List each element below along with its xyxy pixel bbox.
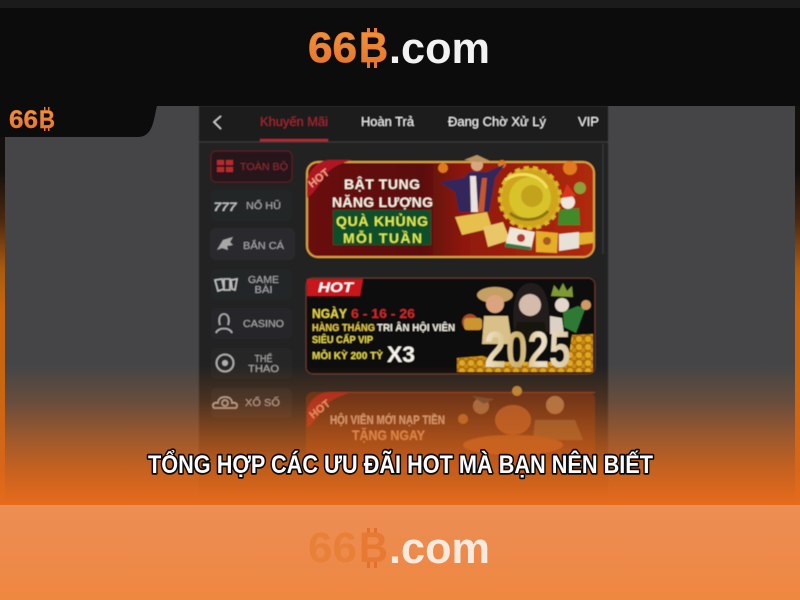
banner headline: BẬT TUNG [344,175,420,192]
header logo: 66B.com: 66 [308,24,357,72]
category: Casino: CASINO [243,319,284,330]
category: Casino [211,308,292,339]
app tab bar: Đang Chờ Xử Lý [448,115,547,129]
app tab bar: Hoàn Trả [361,115,414,129]
banner headline: NĂNG LƯỢNG [332,194,433,210]
grey screenshot background [5,106,795,506]
category: Nổ Hũ: NỔ HŨ [246,199,281,212]
category: Game Bài [211,269,292,300]
category: Xổ Số [211,388,292,418]
app tab bar: VIP [578,115,599,129]
promo banner: Hội viên mới nạp tiền [306,386,595,472]
app tab bar: Khuyến Mãi [260,115,328,129]
banner copy: HÀNG THÁNG [312,321,375,334]
banner copy: TRI ÂN HỘI VIÊN [377,321,455,334]
old man character [558,182,586,225]
banner copy: MỖI KỲ 200 TỶ [312,349,383,362]
hot label: HOT [318,279,355,295]
category: Thể Thao [211,348,292,379]
banner copy [312,306,455,367]
category: Nổ Hũ: 777 [214,200,238,214]
phone app screenshot [199,106,608,506]
bottom orange band [0,505,800,600]
explorer character [440,155,505,212]
banner copy: NGÀY [312,306,348,321]
header logo: 66B.com: .com [389,24,490,73]
promo banner: Hội viên mới nạp tiền: HỘI VIÊN MỚI NẠP TIỀN [330,412,445,427]
category: Toàn Bộ: TOÀN BỘ [240,160,288,173]
sidebar categories [210,151,295,418]
corner logo tab [0,106,157,137]
category: Bắn Cá: BẮN CÁ [243,239,284,252]
header logo: 66B.com [308,24,490,73]
category: Toàn Bộ [211,151,292,182]
banner copy: X3 [387,342,415,367]
app tab bar [199,106,608,143]
promo banner: Bật Tung Năng Lượng [306,155,594,257]
hot label [307,279,363,296]
mahjong tiles [455,212,593,253]
hot ribbon: HOT [306,167,332,191]
promo banner: Ngày 6-16-26 [306,278,595,378]
category: Game Bài: BÀI [254,283,272,296]
lanterns artwork [438,160,577,175]
faded footer logo: .com [389,524,490,573]
characters artwork [462,283,591,344]
corner logo tab: B [39,106,55,134]
promo banner: Hội viên mới nạp tiền: HOT [307,398,333,422]
banner headline [332,175,433,246]
category: Game Bài: GAME [248,275,279,286]
faded footer logo [308,524,490,573]
banner headline: QUÀ KHỦNG [336,212,428,229]
banner headline: MỖI TUẦN [343,229,422,246]
2025 numerals: 2025 [484,321,570,378]
category: Thể Thao: THỂ [254,352,273,365]
faded footer logo: 66 [308,524,357,572]
side edge strips [0,106,800,507]
corner logo tab: 66 [9,106,38,134]
orange fade overlay [0,365,800,506]
banner copy: SIÊU CẤP VIP [312,333,373,346]
title: TỔNG HỢP CÁC ƯU ĐÃI HOT MÀ BẠN NÊN BIẾT [148,449,653,479]
category: Bắn Cá [210,228,295,260]
category: Xổ Số: XỔ SỐ [245,395,280,409]
faded footer logo: B [359,524,388,572]
golden dragon coin [500,168,560,228]
characters artwork [458,386,583,455]
category: Thể Thao: THAO [248,364,279,375]
banner copy: 6 - 16 - 26 [351,307,415,321]
hot ribbon [306,160,352,198]
top header band [0,0,800,106]
coin piles [457,334,593,372]
header logo: 66B.com: B [359,24,388,72]
category: Nổ Hũ [211,190,292,221]
promo banner: Hội viên mới nạp tiền: TẶNG NGAY [352,428,425,443]
